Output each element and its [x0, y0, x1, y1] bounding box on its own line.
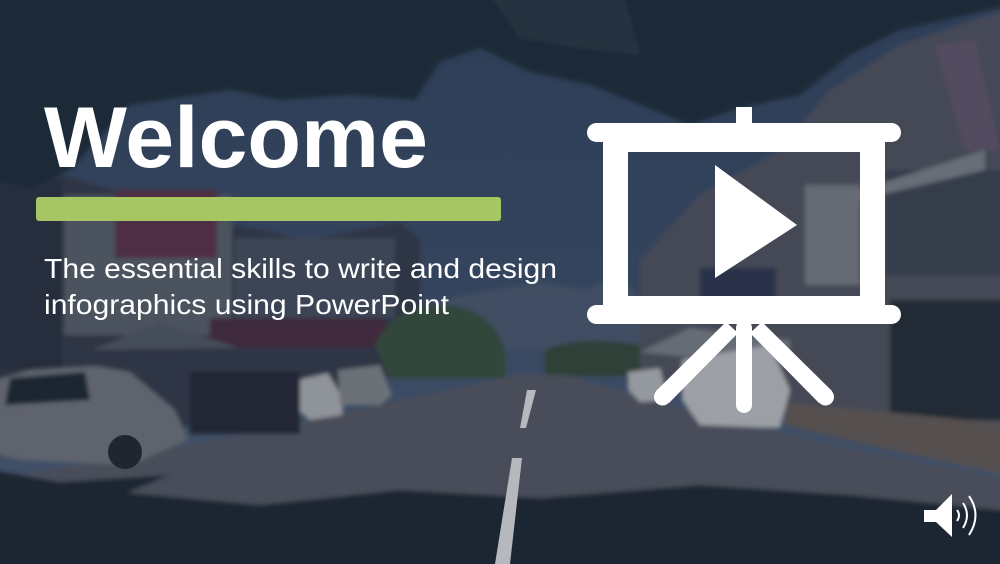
green accent bar: [36, 197, 501, 221]
road markings: [520, 390, 536, 428]
tree shadow on road: [0, 485, 1000, 564]
distant mountains: [440, 275, 640, 350]
icon: speaker audio: [924, 494, 976, 537]
left buildings: [0, 170, 420, 445]
icon: presentation screen with play button: [587, 107, 901, 413]
left car cluster: [0, 366, 188, 465]
right vehicles: [628, 368, 668, 402]
sidewalk right: [785, 402, 1000, 478]
road: [0, 375, 1000, 564]
subtitle: infographics using PowerPoint: [44, 289, 449, 320]
subtitle: The essential skills to write and design: [44, 253, 557, 284]
trees in the distance: [375, 305, 505, 378]
tree canopy: [0, 0, 1000, 190]
right buildings: [640, 5, 1000, 450]
subtitle: [44, 253, 557, 320]
title: Welcome: [44, 90, 428, 186]
